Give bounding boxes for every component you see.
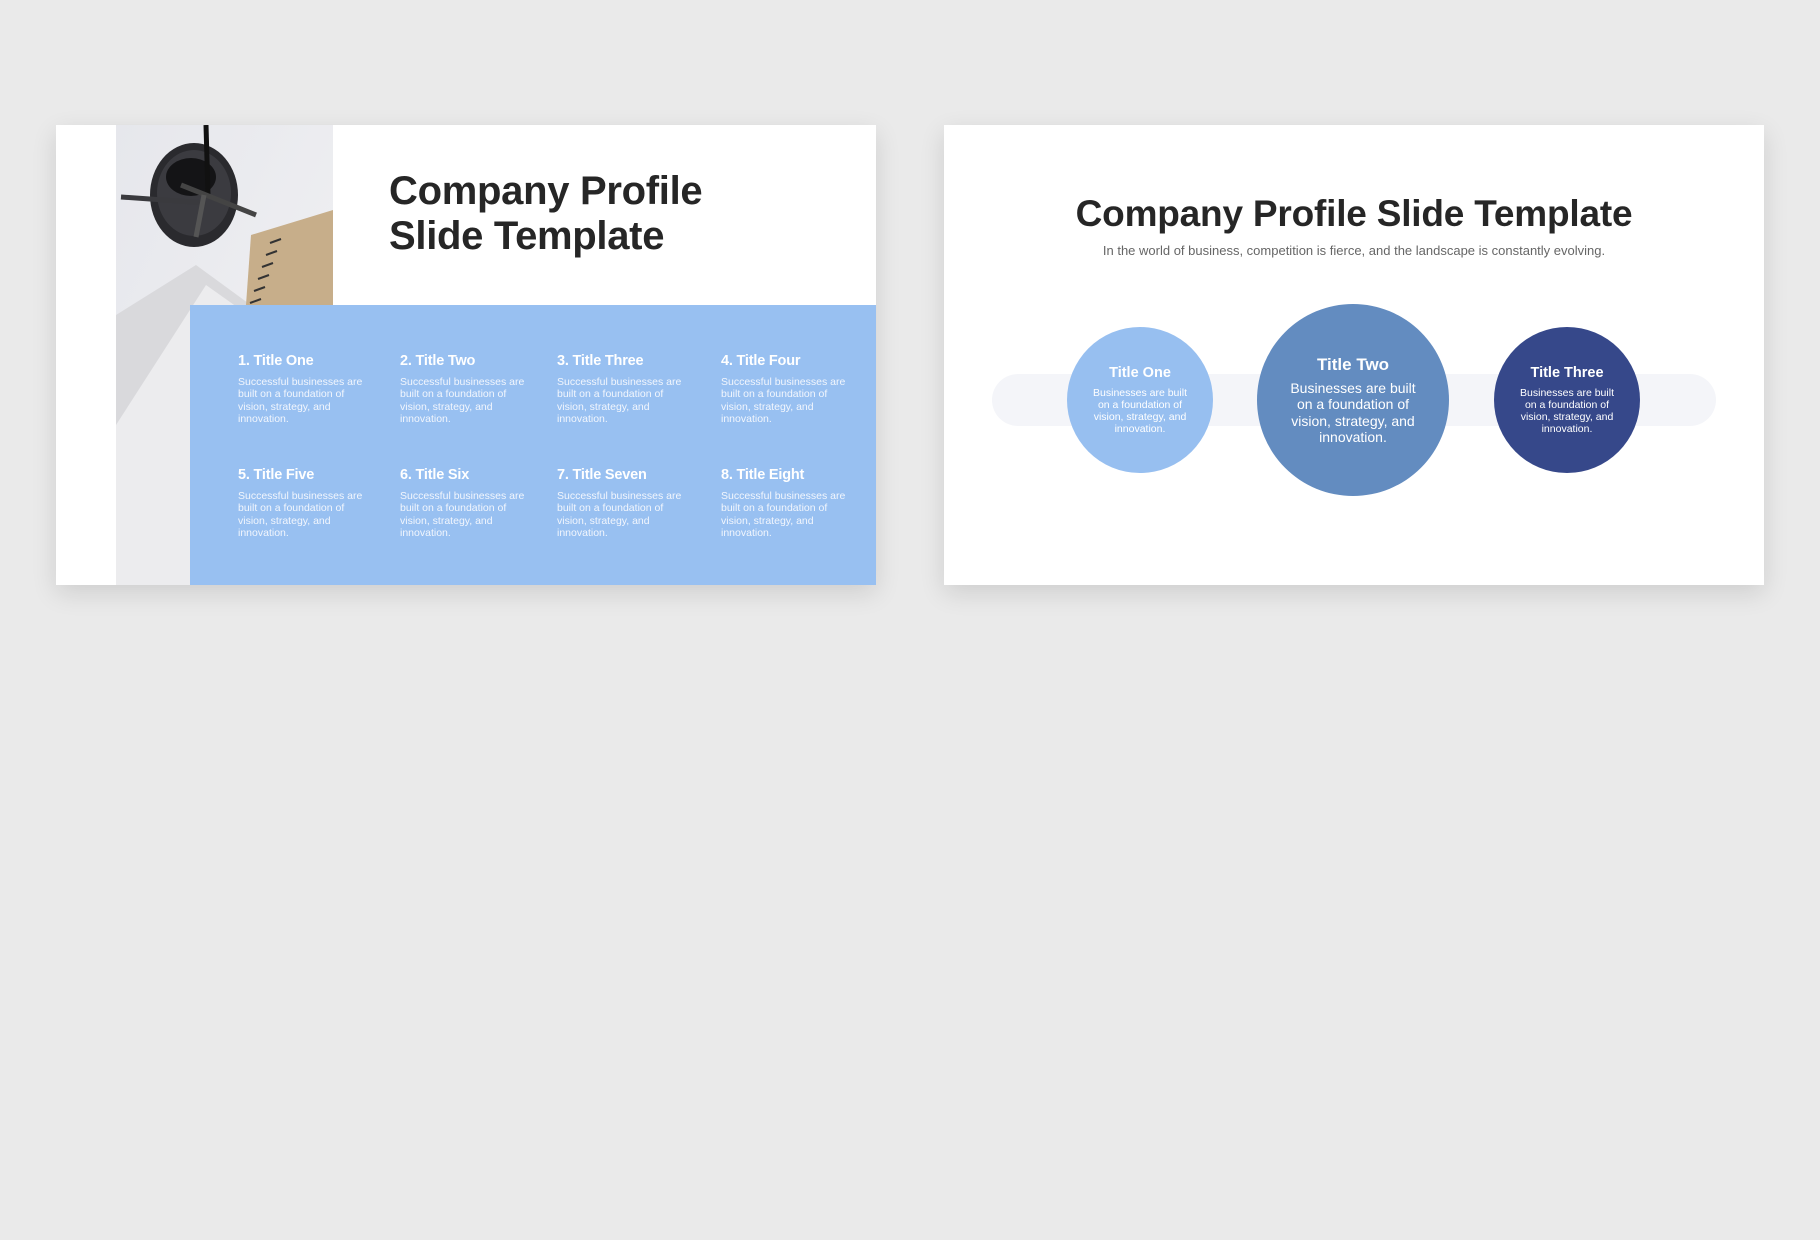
- circle: title one: Businesses are built on a foundation of vision, strategy, and innovation.: [1093, 387, 1187, 435]
- panel: left slide: [56, 125, 876, 585]
- item 3: [557, 353, 681, 425]
- circle: title one: Title One: [1109, 365, 1171, 381]
- item 2: 2. Title Two: [400, 353, 475, 369]
- item 1: [238, 353, 362, 425]
- item 5: [238, 467, 362, 539]
- photo: desk with pen cup and notebook: [116, 125, 333, 585]
- circle: title two: [1257, 304, 1449, 496]
- circle: title two: Businesses are built on a foundation of vision, strategy, and innovation.: [1290, 380, 1416, 445]
- item 6: Successful businesses are built on a foundation of vision, strategy, and innovation.: [400, 490, 524, 539]
- title: Slide Template: [389, 214, 664, 258]
- panel: right slide: [944, 125, 1764, 585]
- item 6: [400, 467, 524, 539]
- item 4: [721, 353, 845, 425]
- item 2: [400, 353, 524, 425]
- circle: title three: [1494, 327, 1640, 473]
- circle: title two: Title Two: [1317, 354, 1389, 374]
- circle: title three: Businesses are built on a foundation of vision, strategy, and innovation.: [1520, 387, 1614, 435]
- item 6: 6. Title Six: [400, 467, 469, 483]
- item 3: Successful businesses are built on a foundation of vision, strategy, and innovation.: [557, 376, 681, 425]
- item 8: Successful businesses are built on a foundation of vision, strategy, and innovation.: [721, 490, 845, 539]
- subtitle: In the world of business, competition is fierce, and the landscape is constantly evolving.: [1103, 243, 1605, 258]
- title: Company Profile: [389, 169, 702, 213]
- item 4: Successful businesses are built on a foundation of vision, strategy, and innovation.: [721, 376, 845, 425]
- circle: title one: [1067, 327, 1213, 473]
- circle: title three: Title Three: [1530, 365, 1604, 381]
- title: Company Profile Slide Template: [1076, 193, 1632, 234]
- item 7: 7. Title Seven: [557, 467, 647, 483]
- item 1: 1. Title One: [238, 353, 314, 369]
- item 8: [721, 467, 845, 539]
- item 1: Successful businesses are built on a foundation of vision, strategy, and innovation.: [238, 376, 362, 425]
- item 7: Successful businesses are built on a foundation of vision, strategy, and innovation.: [557, 490, 681, 539]
- title: [389, 169, 702, 258]
- item 3: 3. Title Three: [557, 353, 643, 369]
- band: [992, 374, 1716, 426]
- item 7: [557, 467, 681, 539]
- item 5: Successful businesses are built on a foundation of vision, strategy, and innovation.: [238, 490, 362, 539]
- item 4: 4. Title Four: [721, 353, 800, 369]
- item 5: 5. Title Five: [238, 467, 314, 483]
- item 2: Successful businesses are built on a foundation of vision, strategy, and innovation.: [400, 376, 524, 425]
- item 8: 8. Title Eight: [721, 467, 804, 483]
- panel: blue feature grid: [190, 305, 876, 585]
